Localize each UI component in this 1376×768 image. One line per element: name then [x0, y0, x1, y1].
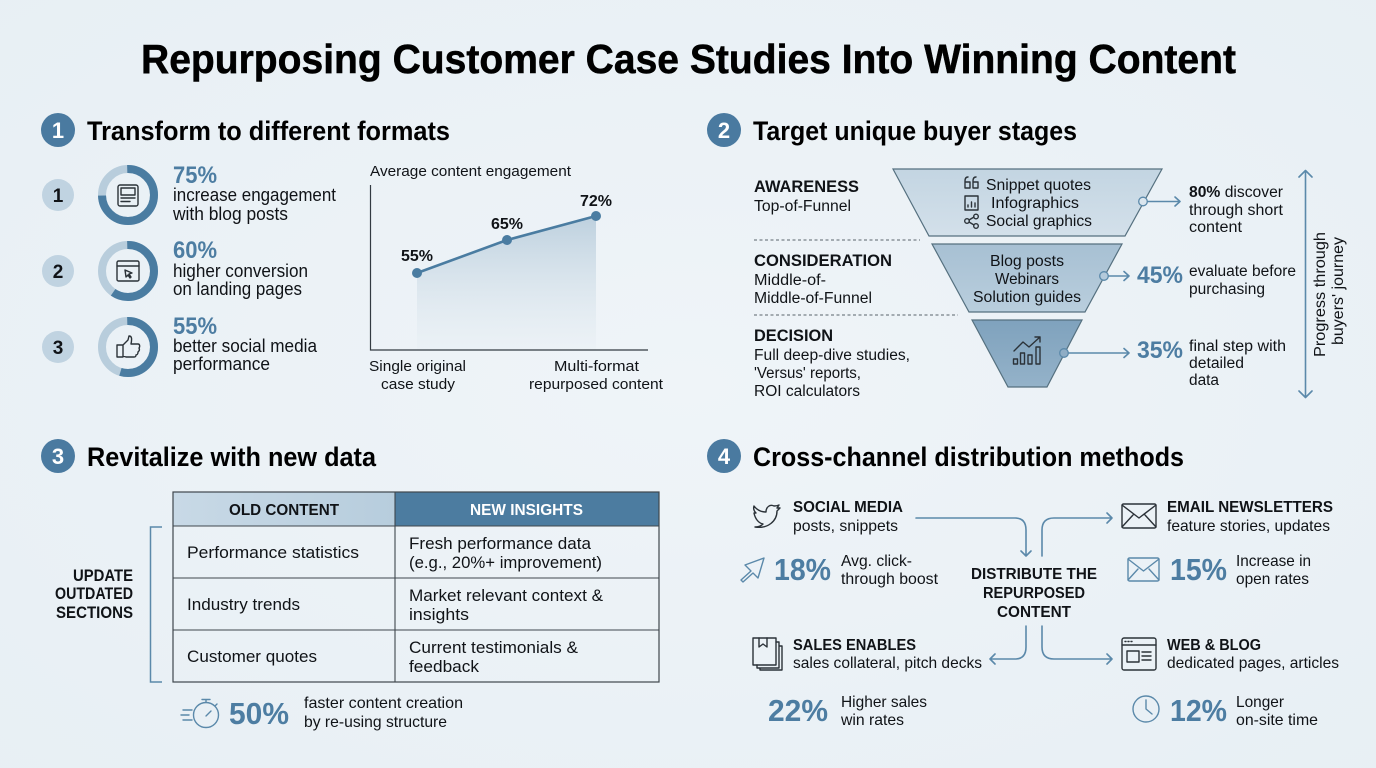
comparison table: OLD CONTENT — [229, 502, 339, 519]
channel: sales enables — [753, 637, 982, 729]
line chart: average content engagement: case study — [381, 376, 456, 393]
stage labels: 'Versus' reports, — [754, 365, 861, 382]
line chart: average content engagement: Average content engagement — [370, 163, 572, 180]
stat row: 75% blog posts: 1 — [53, 186, 64, 207]
title: Repurposing Customer Case Studies Into Winning Content — [141, 36, 1236, 82]
funnel stat callouts: purchasing — [1189, 281, 1265, 298]
bracket label: update outdated sections: SECTIONS — [56, 604, 133, 622]
stat row: 75% blog posts — [42, 162, 336, 224]
line chart: average content engagement: 55% — [401, 248, 433, 265]
panel: cross-channel distribution — [707, 439, 1339, 729]
funnel tier: awareness: Snippet quotes — [986, 177, 1091, 194]
channel: web and blog: Longer — [1236, 694, 1285, 711]
stage labels: Full deep-dive studies, — [754, 347, 910, 364]
arrow: progress through buyers' journey: Progress through — [1312, 232, 1329, 357]
heading: section 4: 4 — [718, 444, 731, 469]
stat row: 55% social media: 3 — [53, 338, 63, 359]
funnel tier: awareness — [893, 169, 1162, 236]
bracket label: update outdated sections: UPDATE — [73, 567, 133, 585]
funnel stat callouts: 35% — [1137, 337, 1183, 364]
line chart: average content engagement: Multi-format — [554, 358, 640, 375]
funnel stat callouts: data — [1189, 372, 1219, 389]
channel: sales enables: 22% — [768, 693, 828, 728]
channel: sales enables: win rates — [840, 712, 904, 729]
channel: sales enables: SALES ENABLES — [793, 637, 916, 654]
stage labels: Middle-of-Funnel — [754, 290, 872, 307]
center label: distribute the repurposed content: DISTRIBUTE THE — [971, 566, 1097, 583]
heading: section 3: 3 — [52, 444, 64, 469]
center label: distribute the repurposed content — [971, 566, 1097, 621]
stage labels: AWARENESS — [754, 177, 859, 196]
funnel stat callouts: final step with — [1189, 338, 1286, 355]
comparison table: (e.g., 20%+ improvement) — [409, 554, 602, 572]
channel: web and blog: 12% — [1170, 693, 1227, 728]
channel: email newsletters: EMAIL NEWSLETTERS — [1167, 499, 1333, 516]
heading: section 1: Transform to different formats — [87, 116, 450, 146]
arrow: progress through buyers' journey: buyers' journey — [1330, 237, 1347, 345]
funnel tier: consideration — [932, 244, 1122, 312]
distribution arrows — [916, 513, 1112, 664]
channel: social media: 18% — [774, 552, 831, 587]
channel: social media: through boost — [841, 571, 939, 588]
heading: section 1: 1 — [52, 118, 64, 143]
channel: web and blog: WEB & BLOG — [1167, 637, 1261, 654]
arrow: progress through buyers' journey — [1299, 170, 1347, 398]
channel: email newsletters: feature stories, updates — [1167, 518, 1330, 535]
stat row: 60% landing pages — [42, 237, 308, 299]
panel: target unique buyer stages — [707, 113, 1347, 400]
comparison table: Industry trends — [187, 595, 300, 614]
stat row: 60% landing pages: 2 — [53, 262, 63, 283]
line chart: average content engagement: repurposed content — [529, 376, 664, 393]
channel: email newsletters: Increase in — [1236, 553, 1311, 570]
heading: section 2: Target unique buyer stages — [753, 116, 1077, 146]
comparison table: Fresh performance data — [409, 535, 592, 553]
heading: section 3: Revitalize with new data — [87, 442, 377, 472]
stat row: 60% landing pages: on landing pages — [173, 279, 302, 299]
comparison table: insights — [409, 606, 469, 624]
funnel stat callouts — [1137, 184, 1296, 389]
stat row: 55% social media — [42, 313, 318, 374]
stage labels: ROI calculators — [754, 383, 860, 400]
funnel stat callouts: 80% discover — [1189, 184, 1283, 201]
channel: social media: Avg. click- — [841, 553, 912, 570]
stage labels: Middle-of- — [754, 272, 826, 289]
funnel — [893, 169, 1162, 387]
comparison table: Performance statistics — [187, 543, 359, 562]
line chart: average content engagement — [369, 163, 664, 393]
stage labels — [754, 177, 958, 400]
funnel tier: consideration: Webinars — [995, 271, 1059, 288]
panel: revitalize with new data — [41, 439, 659, 731]
funnel stat callouts: 45% — [1137, 262, 1183, 289]
channel: sales enables: Higher sales — [841, 694, 927, 711]
stage labels: Top-of-Funnel — [754, 198, 851, 215]
stat row: 75% blog posts: increase engagement — [173, 185, 336, 205]
channel: sales enables: sales collateral, pitch decks — [793, 655, 982, 672]
comparison table: Market relevant context & — [409, 587, 603, 605]
panel: transform to different formats — [41, 113, 664, 393]
channel: social media: SOCIAL MEDIA — [793, 499, 903, 516]
stat row: 55% social media: performance — [173, 354, 270, 374]
center label: distribute the repurposed content: REPURPOSED — [983, 585, 1085, 602]
bracket label: update outdated sections: OUTDATED — [55, 585, 133, 603]
stat row: 75% blog posts: 75% — [173, 162, 217, 189]
comparison table: Current testimonials & — [409, 639, 578, 657]
heading: section 4: Cross-channel distribution methods — [753, 442, 1184, 472]
comparison table: NEW INSIGHTS — [470, 502, 583, 519]
stat: 50% faster content creation — [181, 695, 463, 731]
funnel stat callouts: through short — [1189, 202, 1284, 219]
line chart: average content engagement: Single original — [369, 358, 466, 375]
stat row: 55% social media: better social media — [173, 336, 318, 356]
channel: web and blog: on-site time — [1236, 712, 1318, 729]
stat row: 55% social media: 55% — [173, 313, 217, 340]
comparison table: Customer quotes — [187, 647, 317, 666]
center label: distribute the repurposed content: CONTENT — [997, 604, 1071, 621]
channel: email newsletters — [1122, 499, 1333, 588]
bracket label: update outdated sections — [55, 527, 162, 682]
funnel stat callouts: detailed — [1189, 355, 1244, 372]
channel: social media — [741, 499, 939, 588]
funnel tier: consideration: Blog posts — [990, 253, 1064, 270]
funnel stat callouts: content — [1189, 219, 1243, 236]
stat row: 60% landing pages: 60% — [173, 237, 217, 264]
stat: 50% faster content creation: by re-using structure — [304, 714, 447, 731]
funnel stat callouts: evaluate before — [1189, 263, 1296, 280]
channel: social media: posts, snippets — [793, 518, 898, 535]
comparison table — [173, 492, 659, 682]
funnel tier: awareness: Social graphics — [986, 213, 1092, 230]
stat row: 60% landing pages: higher conversion — [173, 261, 308, 281]
line chart: average content engagement: 72% — [580, 193, 612, 210]
stage labels: DECISION — [754, 326, 833, 345]
channel: email newsletters: open rates — [1236, 571, 1309, 588]
funnel tier: decision — [972, 320, 1082, 387]
stat row: 75% blog posts: with blog posts — [172, 204, 288, 224]
channel: email newsletters: 15% — [1170, 552, 1227, 587]
heading: section 2: 2 — [718, 118, 730, 143]
comparison table: feedback — [409, 658, 480, 676]
line chart: average content engagement: 65% — [491, 216, 523, 233]
channel: web and blog: dedicated pages, articles — [1167, 655, 1339, 672]
funnel tier: consideration: Solution guides — [973, 289, 1081, 306]
funnel tier: awareness: Infographics — [991, 195, 1079, 212]
stat: 50% faster content creation: 50% — [229, 696, 289, 731]
stat: 50% faster content creation: faster content creation — [304, 695, 463, 712]
stage labels: CONSIDERATION — [754, 251, 892, 270]
channel: web and blog — [1122, 637, 1339, 729]
funnel connector arrows — [1060, 197, 1180, 358]
